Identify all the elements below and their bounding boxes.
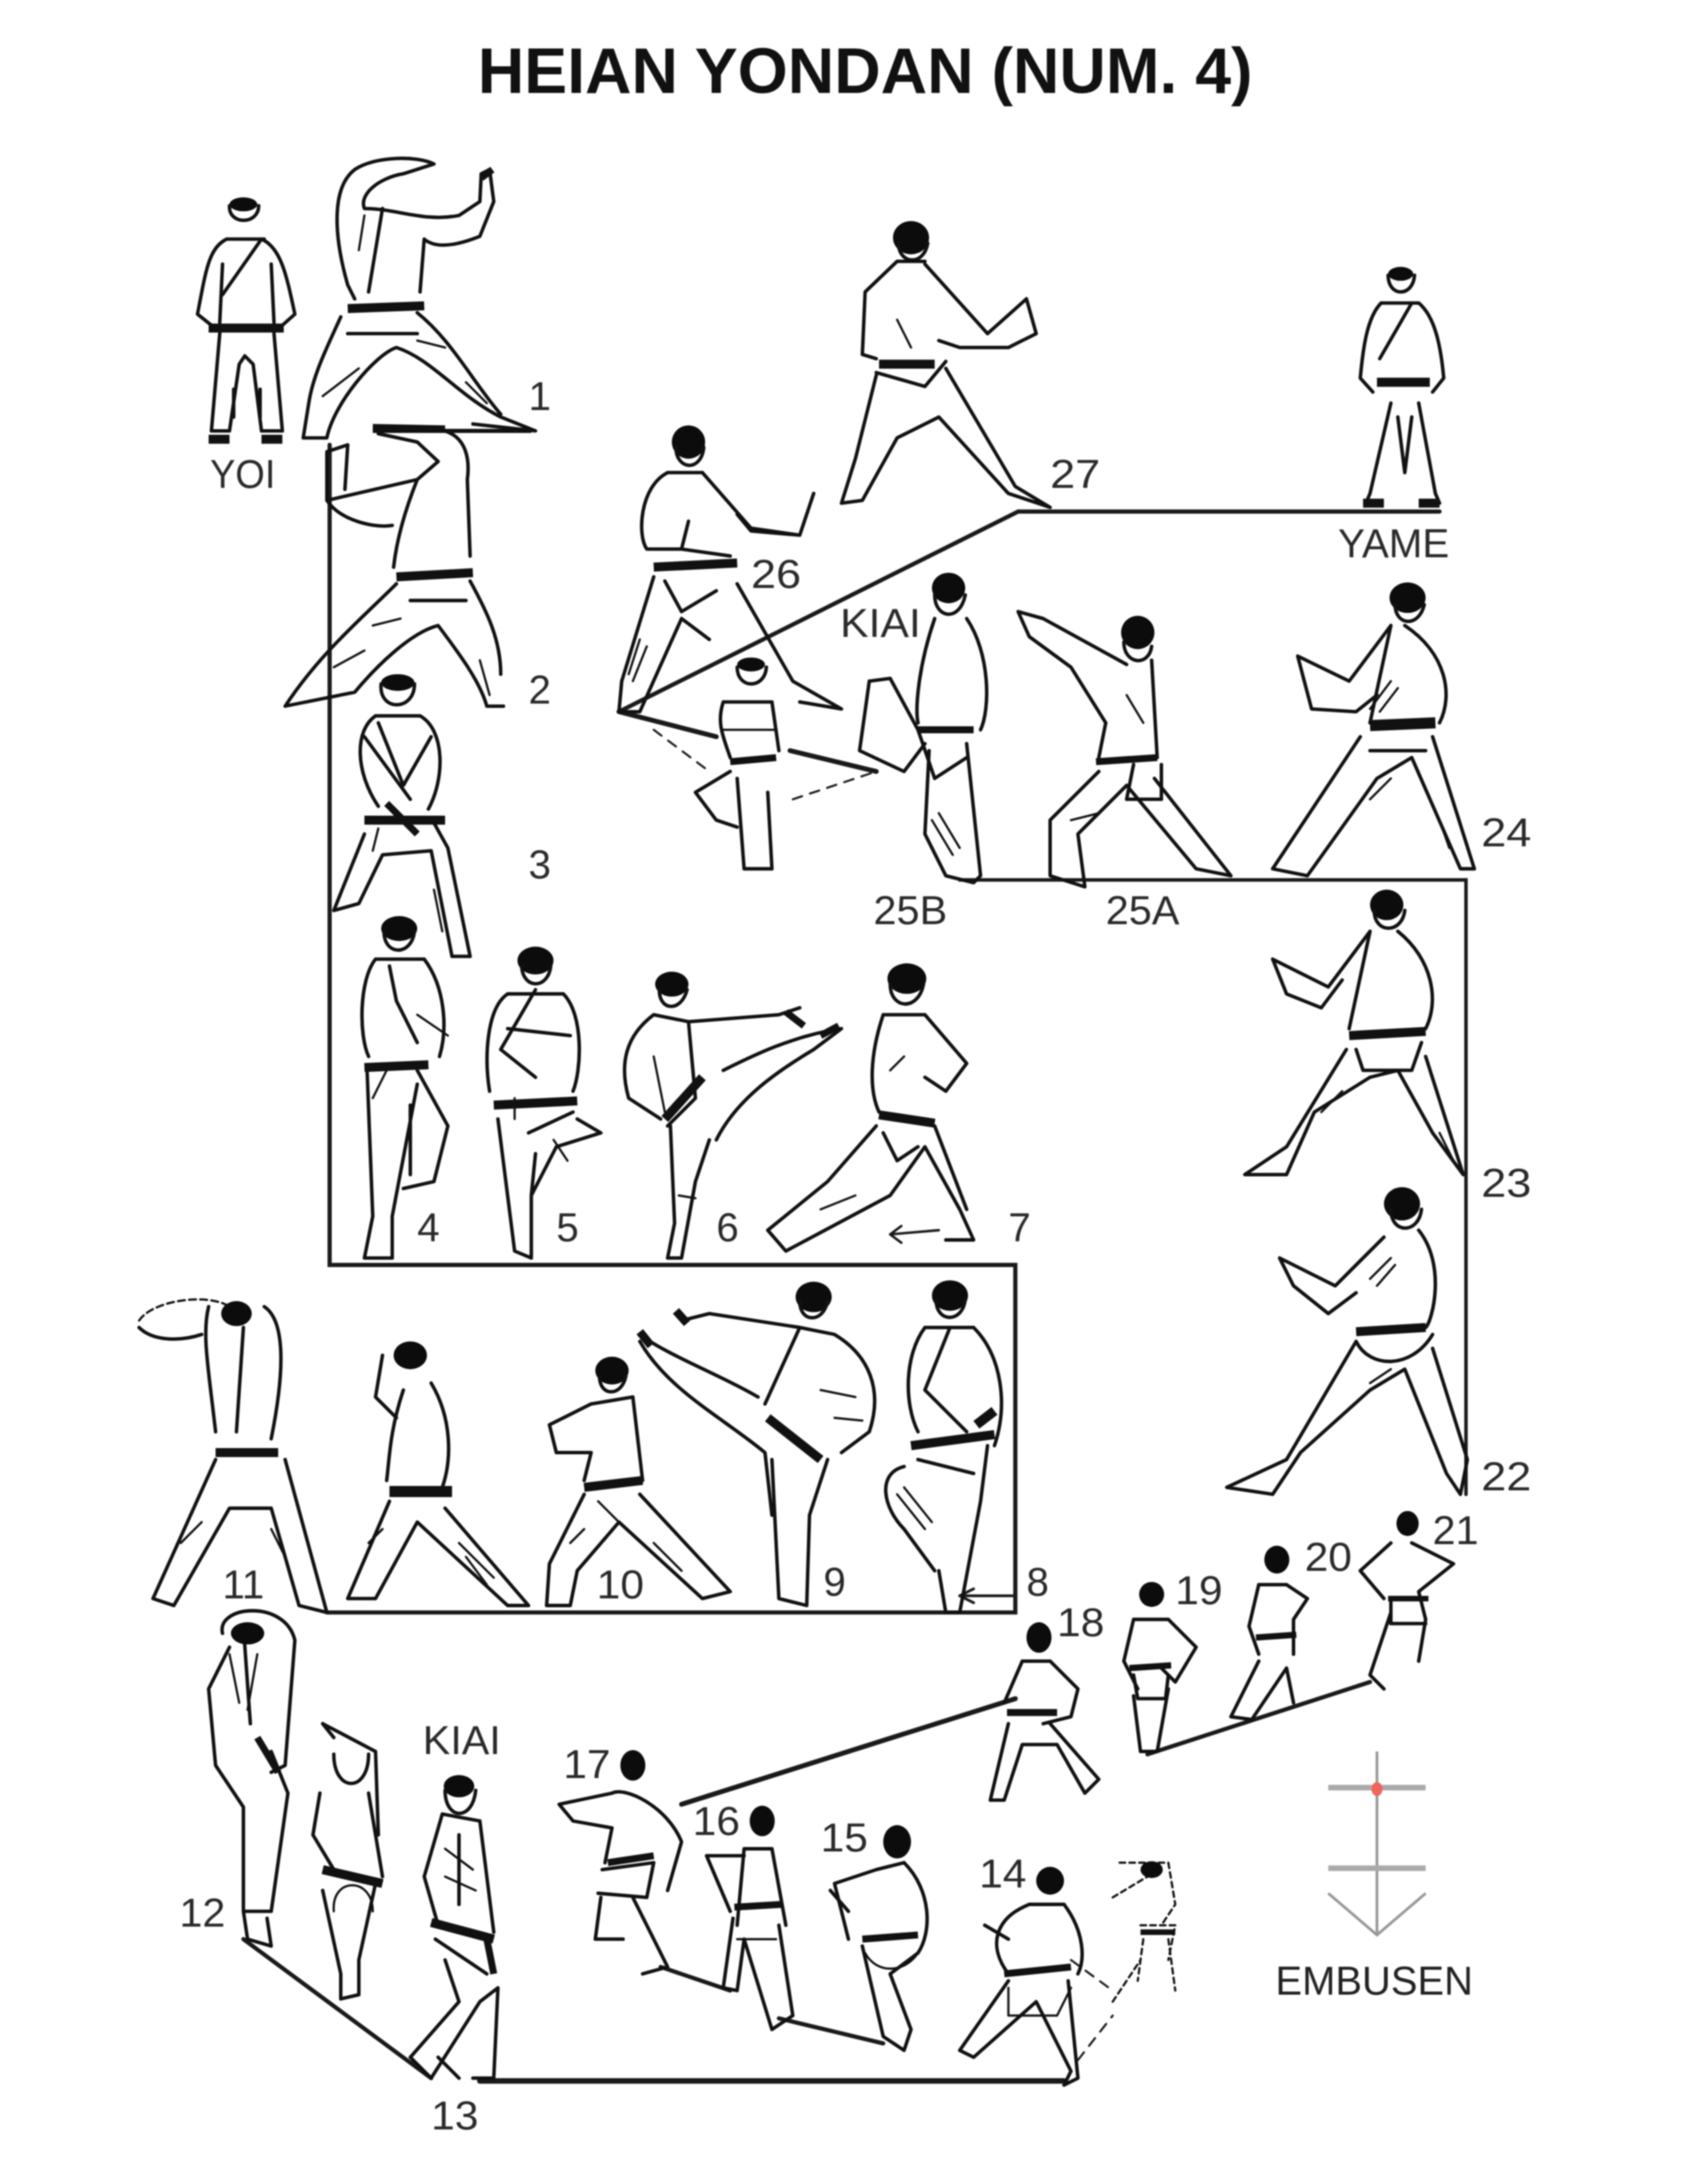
step labels: 9 xyxy=(824,1559,846,1605)
figure: step 10 preparation xyxy=(348,1341,528,1606)
figure: step 26 front view xyxy=(696,657,779,869)
figure: step 15 xyxy=(830,1825,927,2050)
figure: step 23 xyxy=(1245,889,1463,1175)
figure: step 11 xyxy=(139,1300,326,1613)
step labels: 18 xyxy=(1057,1599,1104,1645)
figure: step 19 xyxy=(1124,1581,1196,1751)
figure: YAME xyxy=(1360,267,1444,503)
step labels: 21 xyxy=(1432,1508,1478,1553)
karate figures xyxy=(139,158,1474,2085)
figure: step 26 xyxy=(619,425,842,712)
step labels: 14 xyxy=(979,1851,1027,1896)
step labels: 17 xyxy=(563,1742,610,1787)
title: HEIAN YONDAN (NUM. 4) xyxy=(478,36,1253,108)
step labels: 1 xyxy=(528,374,551,419)
figure: step 1 xyxy=(303,158,536,438)
step labels: 7 xyxy=(1009,1205,1031,1251)
figure: step 6 xyxy=(624,971,842,1258)
embusen diagram xyxy=(1276,1751,1473,2004)
embusen floor path lines xyxy=(244,445,1466,2080)
figure: step 14 ghost xyxy=(1113,1862,1175,2001)
figure: step 24 xyxy=(1273,583,1474,876)
step labels: KIAI xyxy=(423,1718,501,1763)
figure: step 21 xyxy=(1360,1511,1454,1689)
step labels: 8 xyxy=(1027,1559,1049,1605)
step labels: KIAI xyxy=(840,600,921,646)
figure: step 25B xyxy=(859,573,987,882)
step labels xyxy=(180,374,1531,2138)
figure: step 12 follow-through xyxy=(313,1724,383,1999)
step labels: 22 xyxy=(1481,1453,1531,1499)
figure: step 14 xyxy=(960,1867,1082,2085)
figure: step 27 xyxy=(842,221,1050,507)
figure: step 9 xyxy=(640,1282,874,1606)
figure: YOI xyxy=(197,197,294,439)
figure: step 20 xyxy=(1231,1546,1308,1719)
step labels: 23 xyxy=(1481,1161,1531,1206)
figure: step 4 xyxy=(362,916,447,1258)
figure: step 2 xyxy=(286,427,504,706)
step labels: 26 xyxy=(751,551,802,597)
figure: step 17 xyxy=(560,1750,681,1974)
step labels: 10 xyxy=(597,1562,644,1607)
step labels: 27 xyxy=(1050,452,1100,497)
step labels: 11 xyxy=(222,1562,264,1607)
step labels: YOI xyxy=(210,452,276,497)
step labels: 4 xyxy=(417,1205,439,1251)
step labels: 6 xyxy=(716,1205,738,1251)
embusen diagram: EMBUSEN xyxy=(1276,1959,1473,2004)
step labels: 12 xyxy=(180,1890,225,1936)
step labels: 24 xyxy=(1481,810,1531,856)
step labels: 20 xyxy=(1305,1534,1352,1580)
figure: step 13 xyxy=(410,1775,498,2078)
step labels: 2 xyxy=(528,667,551,712)
figure: step 3 xyxy=(334,674,470,956)
step labels: 19 xyxy=(1175,1567,1222,1613)
step labels: 25A xyxy=(1106,888,1180,933)
step labels: YAME xyxy=(1338,521,1449,567)
step labels: 25B xyxy=(874,888,947,933)
step labels: 15 xyxy=(820,1815,868,1861)
figure: step 8 xyxy=(886,1280,1002,1613)
step labels: 5 xyxy=(556,1205,579,1251)
step labels: 16 xyxy=(693,1799,740,1844)
step labels: 13 xyxy=(431,2093,479,2138)
figure: step 16 xyxy=(706,1806,793,2030)
figure: step 7 xyxy=(768,963,973,1251)
figure: step 25A xyxy=(1018,612,1231,887)
figure: step 22 xyxy=(1227,1187,1468,1494)
step labels: 3 xyxy=(528,842,551,888)
figure: step 18 xyxy=(990,1622,1099,1800)
figure: step 12 xyxy=(209,1611,294,1946)
figure: step 5 xyxy=(487,946,600,1258)
figure: step 10 xyxy=(546,1356,730,1606)
